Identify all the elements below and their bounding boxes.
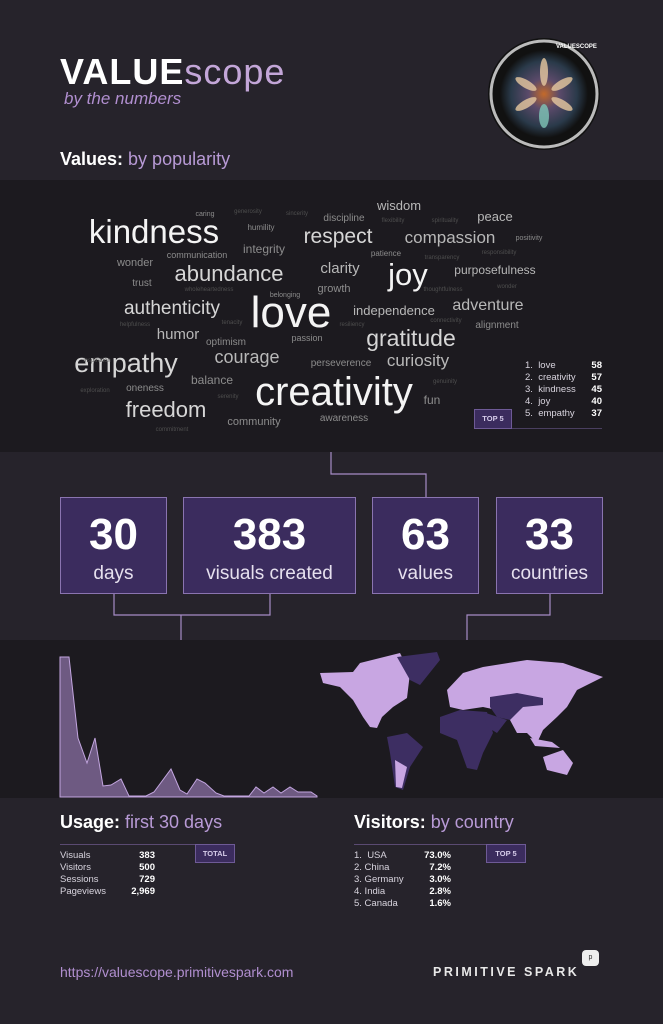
word cloud: trust bbox=[132, 278, 152, 289]
country table: 4. India bbox=[354, 886, 385, 897]
word cloud: passion bbox=[291, 333, 323, 343]
word cloud: compassion bbox=[405, 228, 495, 247]
band: chart and map background bbox=[0, 640, 663, 798]
word cloud: generosity bbox=[234, 209, 262, 215]
heading: visitors: Visitors: by country bbox=[354, 812, 514, 832]
word cloud: flexibility bbox=[382, 218, 404, 224]
country table: 2.8% bbox=[429, 886, 451, 897]
word cloud: wisdom bbox=[376, 198, 421, 213]
word cloud: alignment bbox=[475, 320, 519, 331]
country table: 1.6% bbox=[429, 898, 451, 909]
country table: 2. China bbox=[354, 862, 389, 873]
tag: total: TOTAL bbox=[203, 849, 227, 858]
word cloud: perseverence bbox=[311, 358, 372, 369]
word cloud: inspiration bbox=[83, 358, 111, 364]
icon: lens logo bbox=[488, 38, 600, 150]
word cloud: spirituality bbox=[432, 218, 458, 224]
tag: top 5 countries: TOP 5 bbox=[495, 849, 517, 858]
stat: 33 countries bbox=[496, 497, 603, 594]
top 5 values list: 1. love bbox=[525, 360, 556, 371]
word cloud: humor bbox=[157, 326, 199, 343]
word cloud: respect bbox=[304, 225, 373, 248]
top 5 values list: 2. creativity bbox=[525, 372, 576, 383]
icon: px badge bbox=[582, 950, 599, 966]
title: VALUEscope bbox=[60, 51, 285, 92]
word cloud: curiosity bbox=[387, 351, 450, 370]
word cloud: communication bbox=[167, 250, 227, 260]
usage table bbox=[60, 850, 155, 897]
word cloud: creativity bbox=[255, 370, 413, 414]
word cloud: caring bbox=[195, 211, 215, 218]
word cloud: wholeheartedness bbox=[184, 287, 233, 293]
stat: 33 countries: countries bbox=[511, 563, 588, 584]
word cloud: exploration bbox=[80, 388, 110, 394]
word cloud: positivity bbox=[516, 235, 543, 242]
stat: 63 values bbox=[372, 497, 479, 594]
stat: 63 values: 63 bbox=[401, 510, 450, 559]
word cloud: integrity bbox=[243, 242, 285, 256]
word cloud: courage bbox=[214, 347, 280, 367]
usage table: 729 bbox=[139, 874, 155, 885]
word cloud: responsibility bbox=[482, 250, 516, 256]
word cloud: wonder bbox=[116, 257, 153, 269]
word cloud: empathy bbox=[74, 348, 178, 378]
word cloud: transparency bbox=[425, 255, 459, 261]
top 5 values list: 57 bbox=[591, 372, 602, 383]
top 5 values list: 5. empathy bbox=[525, 408, 575, 419]
stat: 33 countries: 33 bbox=[525, 510, 574, 559]
subtitle: by the numbers bbox=[64, 89, 181, 108]
word cloud: adventure bbox=[452, 297, 524, 314]
word cloud: commitment bbox=[156, 427, 189, 433]
word cloud: kindness bbox=[89, 213, 219, 250]
word cloud: freedom bbox=[126, 397, 206, 422]
word cloud: thoughtfulness bbox=[423, 287, 463, 293]
word cloud: serenity bbox=[217, 394, 239, 400]
top 5 values list: 3. kindness bbox=[525, 384, 576, 395]
word cloud bbox=[74, 198, 543, 433]
top 5 values list: 37 bbox=[591, 408, 602, 419]
map: world visitors bbox=[320, 652, 603, 790]
stat: 63 values: values bbox=[398, 563, 453, 584]
word cloud: discipline bbox=[323, 213, 365, 224]
top 5 values list: 58 bbox=[591, 360, 602, 371]
stat: 383 visuals: 383 bbox=[233, 510, 306, 559]
word cloud: humility bbox=[247, 223, 275, 232]
word cloud: helpfulness bbox=[120, 322, 150, 328]
word cloud: optimism bbox=[206, 337, 246, 348]
country table: 73.0% bbox=[424, 850, 451, 861]
usage table: Sessions bbox=[60, 874, 99, 885]
heading: usage: Usage: first 30 days bbox=[60, 812, 222, 832]
area chart: usage bbox=[60, 656, 318, 798]
word cloud: tenacity bbox=[222, 320, 242, 326]
stat: 30 days bbox=[60, 497, 167, 594]
word cloud: sincerity bbox=[286, 211, 308, 217]
tag: top 5 values bbox=[474, 409, 512, 429]
word cloud: independence bbox=[353, 303, 435, 318]
usage table: Pageviews bbox=[60, 886, 106, 897]
usage table: 2,969 bbox=[131, 886, 155, 897]
icon: px badge: p bbox=[589, 954, 592, 961]
word cloud: clarity bbox=[320, 260, 360, 277]
heading: values by popularity: Values: by popularity bbox=[60, 149, 230, 169]
word cloud: patience bbox=[371, 249, 402, 258]
word cloud: peace bbox=[477, 209, 513, 224]
usage table: 383 bbox=[139, 850, 155, 861]
country table: 5. Canada bbox=[354, 898, 398, 909]
tag: total bbox=[195, 844, 235, 863]
connectors bbox=[113, 452, 551, 640]
country table: 1. USA bbox=[354, 850, 387, 861]
usage table: Visuals bbox=[60, 850, 90, 861]
word cloud: abundance bbox=[175, 261, 283, 286]
icon: lens logo: VALUESCOPE bbox=[556, 44, 597, 50]
country table: 3.0% bbox=[429, 874, 451, 885]
word cloud: joy bbox=[387, 257, 428, 292]
word cloud: fun bbox=[424, 393, 440, 407]
country table: 7.2% bbox=[429, 862, 451, 873]
stat: 30 days: 30 bbox=[89, 510, 138, 559]
word cloud: gratitude bbox=[366, 325, 456, 351]
word cloud: connectivity bbox=[430, 318, 462, 324]
word cloud: love bbox=[251, 288, 331, 337]
word cloud: genuinity bbox=[433, 379, 457, 385]
word cloud: purposefulness bbox=[454, 263, 536, 277]
word cloud: wonder bbox=[496, 284, 517, 290]
band: word cloud background bbox=[0, 180, 663, 452]
tag: top 5 values: TOP 5 bbox=[482, 414, 504, 423]
country table bbox=[354, 850, 451, 909]
footer logo: PRIMITIVE SPARK bbox=[433, 965, 579, 979]
word cloud: community bbox=[227, 416, 281, 428]
stat: 383 visuals bbox=[183, 497, 356, 594]
top 5 values list: 45 bbox=[591, 384, 602, 395]
word cloud: resiliency bbox=[339, 322, 365, 328]
word cloud: growth bbox=[317, 283, 351, 295]
footer url: https://valuescope.primitivespark.com bbox=[60, 964, 293, 980]
word cloud: balance bbox=[191, 373, 233, 387]
top 5 values list bbox=[525, 360, 602, 419]
word cloud: awareness bbox=[320, 413, 368, 424]
word cloud: oneness bbox=[126, 383, 164, 394]
stat: 30 days: days bbox=[93, 563, 134, 584]
country table: 3. Germany bbox=[354, 874, 404, 885]
usage table: 500 bbox=[139, 862, 155, 873]
tag: top 5 countries bbox=[486, 844, 526, 863]
top 5 values list: 4. joy bbox=[525, 396, 550, 407]
usage table: Visitors bbox=[60, 862, 91, 873]
top 5 values list: 40 bbox=[591, 396, 602, 407]
word cloud: belonging bbox=[270, 292, 300, 299]
word cloud: authenticity bbox=[124, 298, 221, 319]
stat: 383 visuals: visuals created bbox=[206, 563, 333, 584]
